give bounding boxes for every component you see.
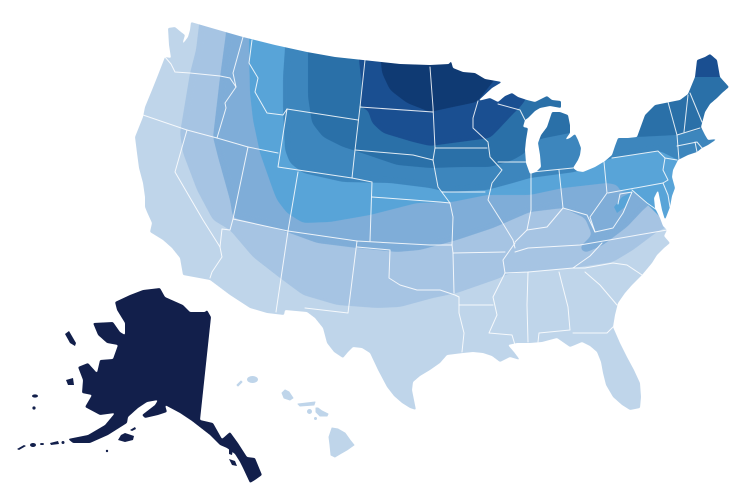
band: strong blue	[283, 47, 716, 192]
icon: Hawaii	[237, 376, 354, 457]
band: medium blue	[213, 32, 648, 252]
band: light blue	[180, 24, 665, 308]
icon: Alaska islands	[17, 331, 237, 466]
contiguous US filled temperature bands	[135, 22, 728, 410]
state borders	[143, 37, 702, 352]
band: lightest	[135, 22, 670, 410]
band: darkest	[381, 62, 494, 112]
icon: Alaska	[17, 288, 262, 483]
band: navy blue Maine	[695, 54, 720, 77]
band: west virginia patch	[614, 192, 632, 213]
band: bright blue	[249, 38, 678, 223]
band: deep blue	[308, 52, 728, 168]
band: navy blue	[359, 60, 526, 146]
